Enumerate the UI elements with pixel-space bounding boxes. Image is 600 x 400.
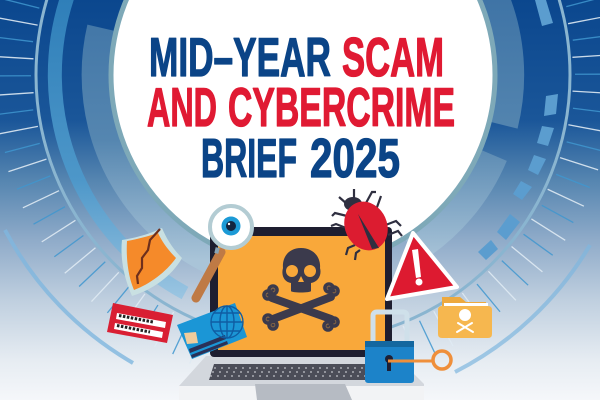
icon: bug — [331, 189, 402, 260]
icon: credit card — [177, 303, 247, 359]
title line 1: SCAM — [342, 26, 444, 88]
laptop screen — [210, 227, 392, 357]
white circle — [111, 0, 495, 267]
icon: warning triangle — [387, 233, 457, 299]
title line 2 — [147, 76, 455, 138]
title — [147, 26, 455, 189]
title line 3: BRIEF — [201, 127, 297, 189]
title line 1: MID–YEAR — [149, 26, 331, 88]
icon: padlock and key — [365, 312, 451, 383]
title line 3: 2025 — [310, 127, 400, 189]
title line 2: AND — [147, 76, 217, 138]
icon: magnifying glass with eye — [196, 206, 252, 298]
crossbones — [266, 286, 336, 328]
icon: password card — [107, 303, 173, 343]
segmented dashes — [478, 0, 558, 260]
icon: cracked shield — [121, 228, 182, 296]
title line 2: CYBERCRIME — [228, 76, 455, 138]
laptop base — [179, 356, 424, 400]
skull and crossbones — [266, 248, 336, 328]
skull — [282, 248, 321, 292]
globe — [211, 306, 243, 338]
keyboard — [209, 364, 366, 380]
laptop — [179, 227, 424, 400]
icon: folder with skull — [438, 297, 492, 338]
